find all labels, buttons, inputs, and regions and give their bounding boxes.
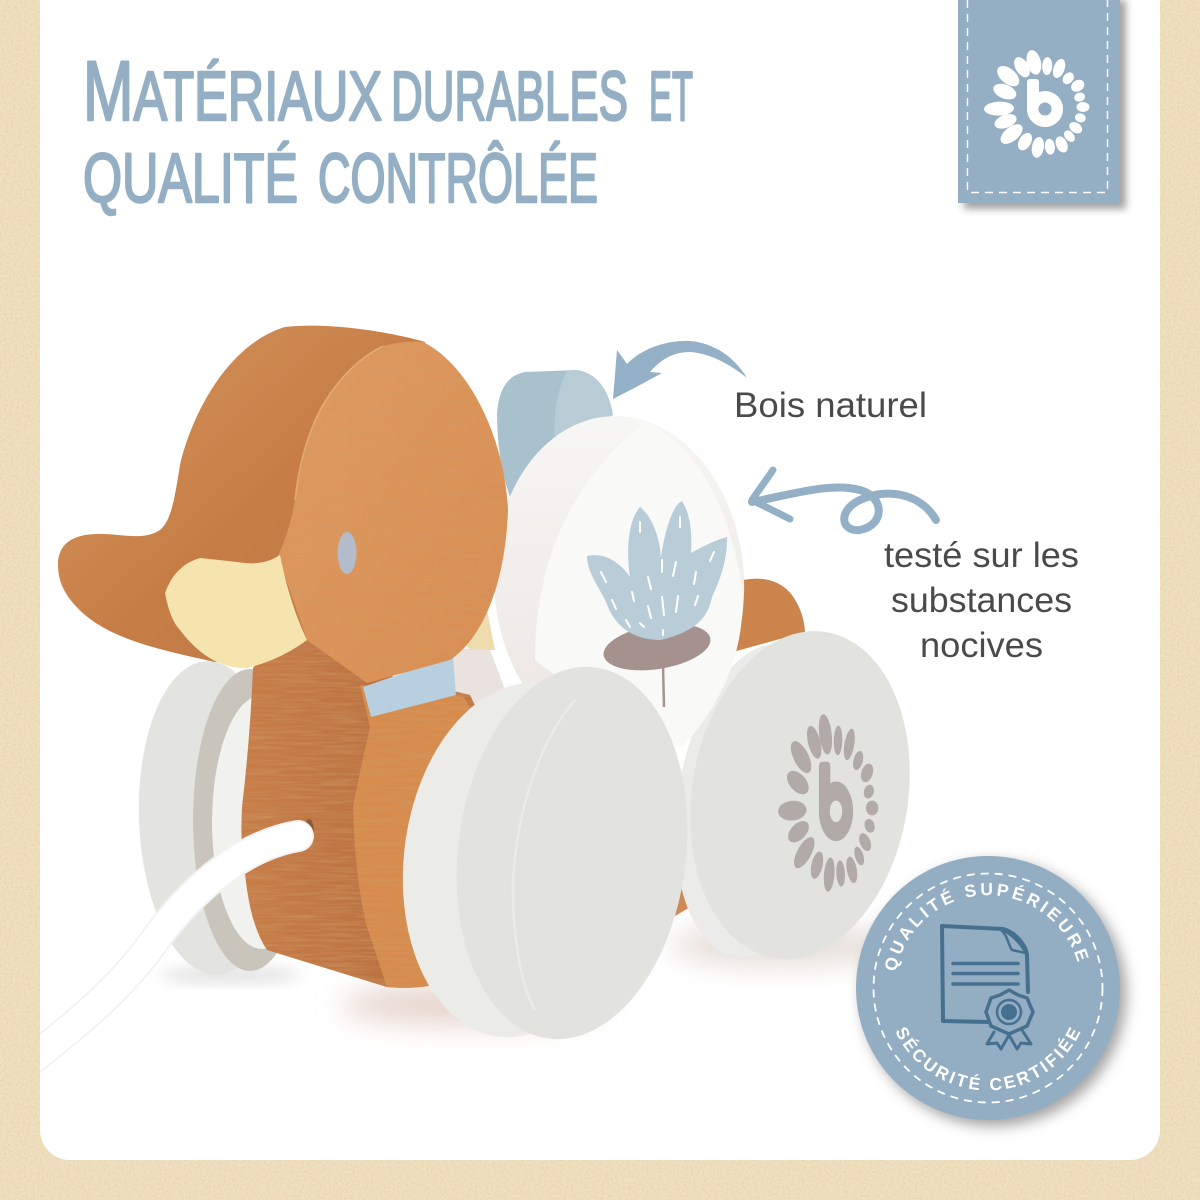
front wheel (383, 654, 708, 1052)
duck body (241, 632, 520, 988)
badge: quality seal (853, 853, 1135, 1135)
toy: wooden pull-along duck (25, 326, 932, 1065)
flower petals (587, 501, 727, 640)
label: tested for harmful substances: substances (891, 581, 1072, 620)
blue collar (363, 656, 456, 717)
rear wood tail (733, 579, 805, 652)
blue wing (497, 370, 613, 497)
label: tested for harmful substances: testé sur les (884, 536, 1079, 575)
title: CONTRÔLÉE (318, 139, 598, 217)
yellow tail tip behind head (462, 600, 495, 650)
title: MATÉRIAUX (83, 44, 382, 138)
title: DURABLES (391, 57, 628, 135)
rear right wheel (654, 615, 932, 975)
pull cord (25, 836, 298, 1065)
inner axle spacer between collar and disc (450, 648, 505, 720)
yellow beak patch (165, 555, 307, 668)
badge text top: QUALITÉ SUPÉRIEURE (885, 883, 1089, 970)
cord hole (304, 819, 314, 845)
floor shadows (160, 925, 890, 1025)
lower wood peg between wheels (670, 880, 694, 919)
icon: sunflower b logo (984, 49, 1090, 159)
duck head face (278, 342, 508, 683)
white flower disc (485, 410, 753, 754)
flower base (600, 617, 714, 677)
label: bois naturel: Bois naturel (734, 386, 927, 425)
stem (663, 665, 664, 707)
arrow: to tested disc (752, 470, 936, 530)
title (83, 44, 693, 217)
label: tested for harmful substances (884, 536, 1079, 665)
icon: certificate document with seal (942, 926, 1033, 1049)
title: QUALITÉ (83, 139, 298, 217)
text: ET (649, 57, 693, 135)
head edge highlight (295, 346, 383, 500)
icon: printed b logo on wheel (778, 712, 878, 893)
label: tested for harmful substances: nocives (920, 626, 1043, 665)
petal dashes (601, 517, 714, 635)
brand tag with stitching (958, 0, 1126, 209)
duck head side and beak (58, 326, 425, 662)
duck eye (338, 532, 356, 574)
arrow: to bois naturel (613, 341, 747, 399)
rear left wheel (134, 659, 312, 977)
badge text bottom: SÉCURITÉ CERTIFIÉE (896, 1027, 1080, 1090)
